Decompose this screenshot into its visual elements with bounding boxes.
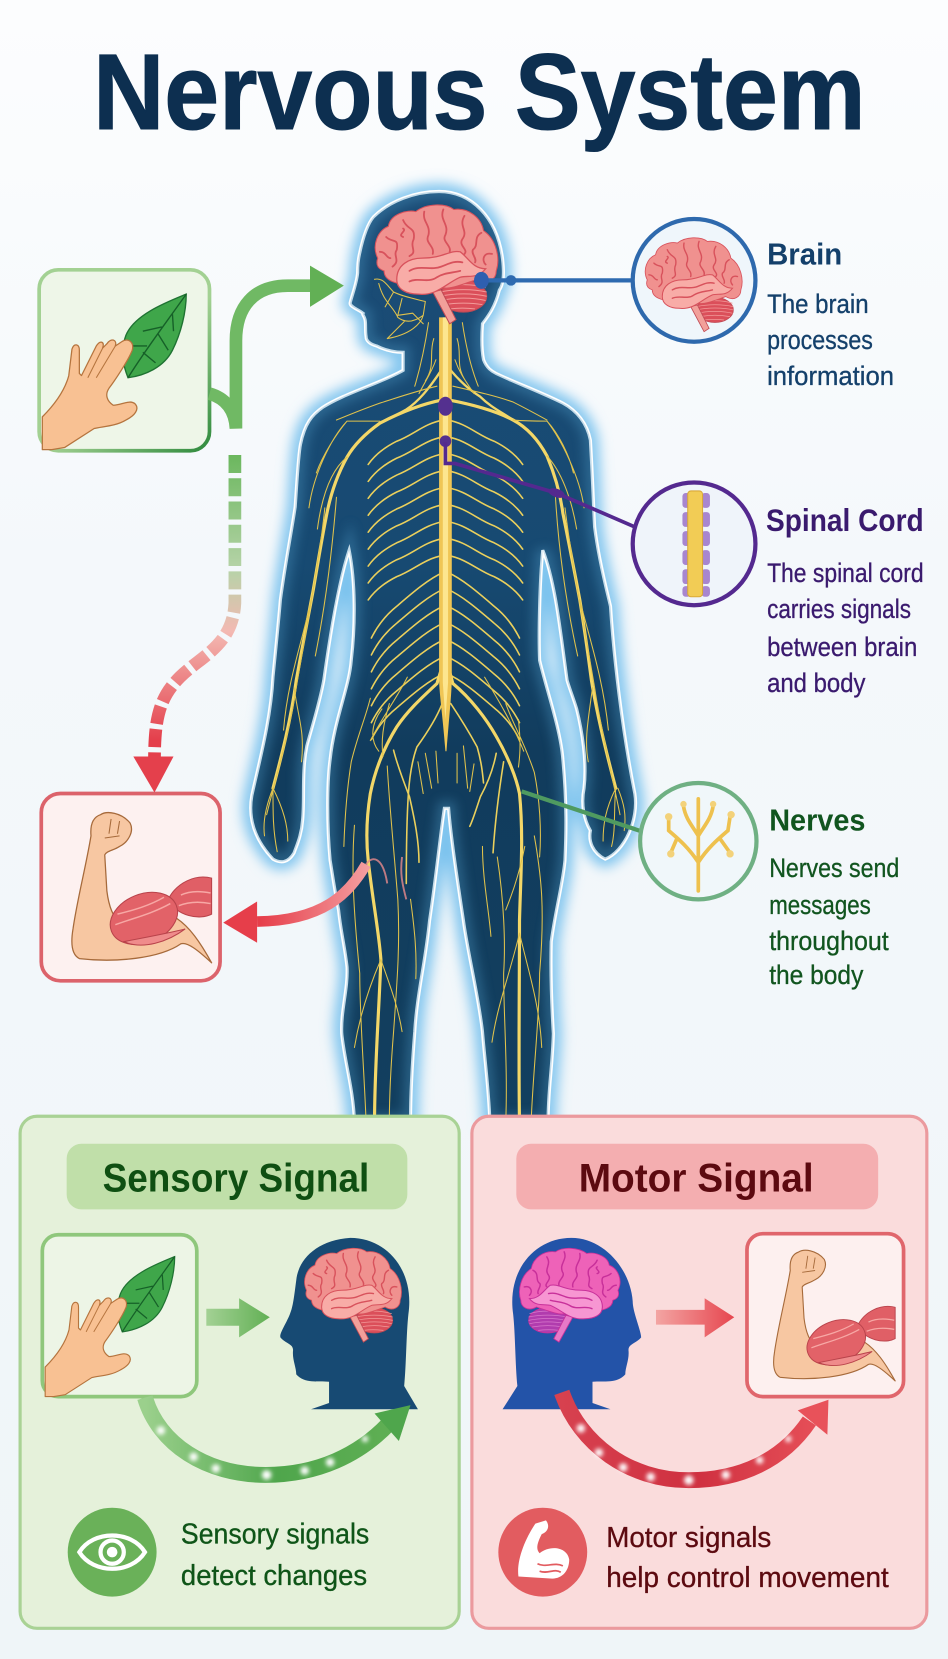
motor description: Motor signals <box>606 1522 771 1554</box>
arrow: to head <box>206 1298 270 1337</box>
motor description <box>606 1522 889 1594</box>
brain in head <box>375 205 498 324</box>
callout: spinal cord <box>633 482 924 698</box>
arrow: sensory pathway <box>145 1398 411 1480</box>
brain heading: Brain <box>767 237 842 272</box>
nerves heading: Nerves <box>769 803 865 838</box>
head with brain <box>503 1238 641 1409</box>
spinal cord description: and body <box>767 668 866 698</box>
spinal cord description: The spinal cord <box>767 558 924 588</box>
box: flexed arm muscle <box>41 794 220 981</box>
spinal cord description: between brain <box>767 632 917 662</box>
nerves description <box>769 853 899 990</box>
sensory description: detect changes <box>181 1560 367 1592</box>
sensory description <box>181 1519 369 1592</box>
spinal cord description: carries signals <box>767 594 911 624</box>
head with brain <box>280 1238 418 1409</box>
ribs left <box>368 420 443 740</box>
arrow: motor signal to arm <box>223 857 406 943</box>
motor heading <box>516 1144 878 1209</box>
body silhouette <box>251 192 636 1122</box>
spinal cord description <box>767 558 924 698</box>
connector: nerves <box>522 791 642 832</box>
flexed arm box <box>747 1234 904 1397</box>
nerves description: the body <box>769 960 864 990</box>
callout: brain <box>633 219 894 391</box>
thin shoulder and arm nerves <box>264 386 625 852</box>
connector: spinal cord <box>438 397 635 527</box>
panel: sensory signal <box>20 1116 459 1628</box>
icon: flexed arm <box>72 813 212 963</box>
icon: nerves circle <box>640 783 756 899</box>
panel background <box>472 1116 927 1628</box>
motor heading: Motor Signal <box>579 1155 814 1200</box>
icon: muscle <box>498 1508 587 1597</box>
icon: spinal cord circle <box>633 482 755 605</box>
arrow: sensory signal to brain <box>209 266 344 429</box>
title: Nervous System <box>93 31 865 152</box>
spinal cord heading: Spinal Cord <box>766 502 924 538</box>
motor description: help control movement <box>606 1562 889 1594</box>
brain description <box>767 289 894 391</box>
panel background <box>20 1116 459 1628</box>
body rim shading <box>251 192 636 1122</box>
sensory heading: Sensory Signal <box>103 1155 369 1200</box>
nerves description: messages <box>769 890 871 920</box>
icon: brain circle <box>633 219 755 342</box>
hand and leaf box <box>42 1235 197 1397</box>
nerves <box>264 279 625 1122</box>
sensory heading <box>67 1144 407 1209</box>
brain description: processes <box>767 325 873 355</box>
secondary pelvic nerves <box>394 704 504 883</box>
box frame <box>39 270 209 451</box>
brain description: The brain <box>767 289 869 319</box>
arrow: dashed signal to muscle <box>133 455 235 792</box>
icon: eye <box>68 1508 157 1597</box>
arrow: to muscle <box>656 1298 734 1337</box>
thin pelvic and leg nerves <box>344 677 542 1122</box>
body glow <box>251 192 636 1122</box>
arm and shoulder nerves <box>273 370 616 788</box>
brain description: information <box>767 361 894 391</box>
arrow: motor pathway <box>562 1392 828 1485</box>
nerves description: throughout <box>769 926 889 956</box>
sensory description: Sensory signals <box>181 1519 369 1551</box>
ribs right <box>448 420 523 740</box>
leg and pelvic nerves <box>367 656 522 1122</box>
box frame <box>41 794 220 981</box>
panel: motor signal <box>472 1116 927 1628</box>
human body with nervous system <box>251 192 636 1122</box>
face and neck nerves <box>375 279 478 394</box>
nerves description: Nerves send <box>769 853 899 883</box>
icon: hand and leaf <box>42 294 186 450</box>
callout: nerves <box>640 783 899 990</box>
box: hand touching leaf <box>39 270 209 451</box>
connector: brain <box>474 272 635 289</box>
spinal cord <box>439 317 452 751</box>
